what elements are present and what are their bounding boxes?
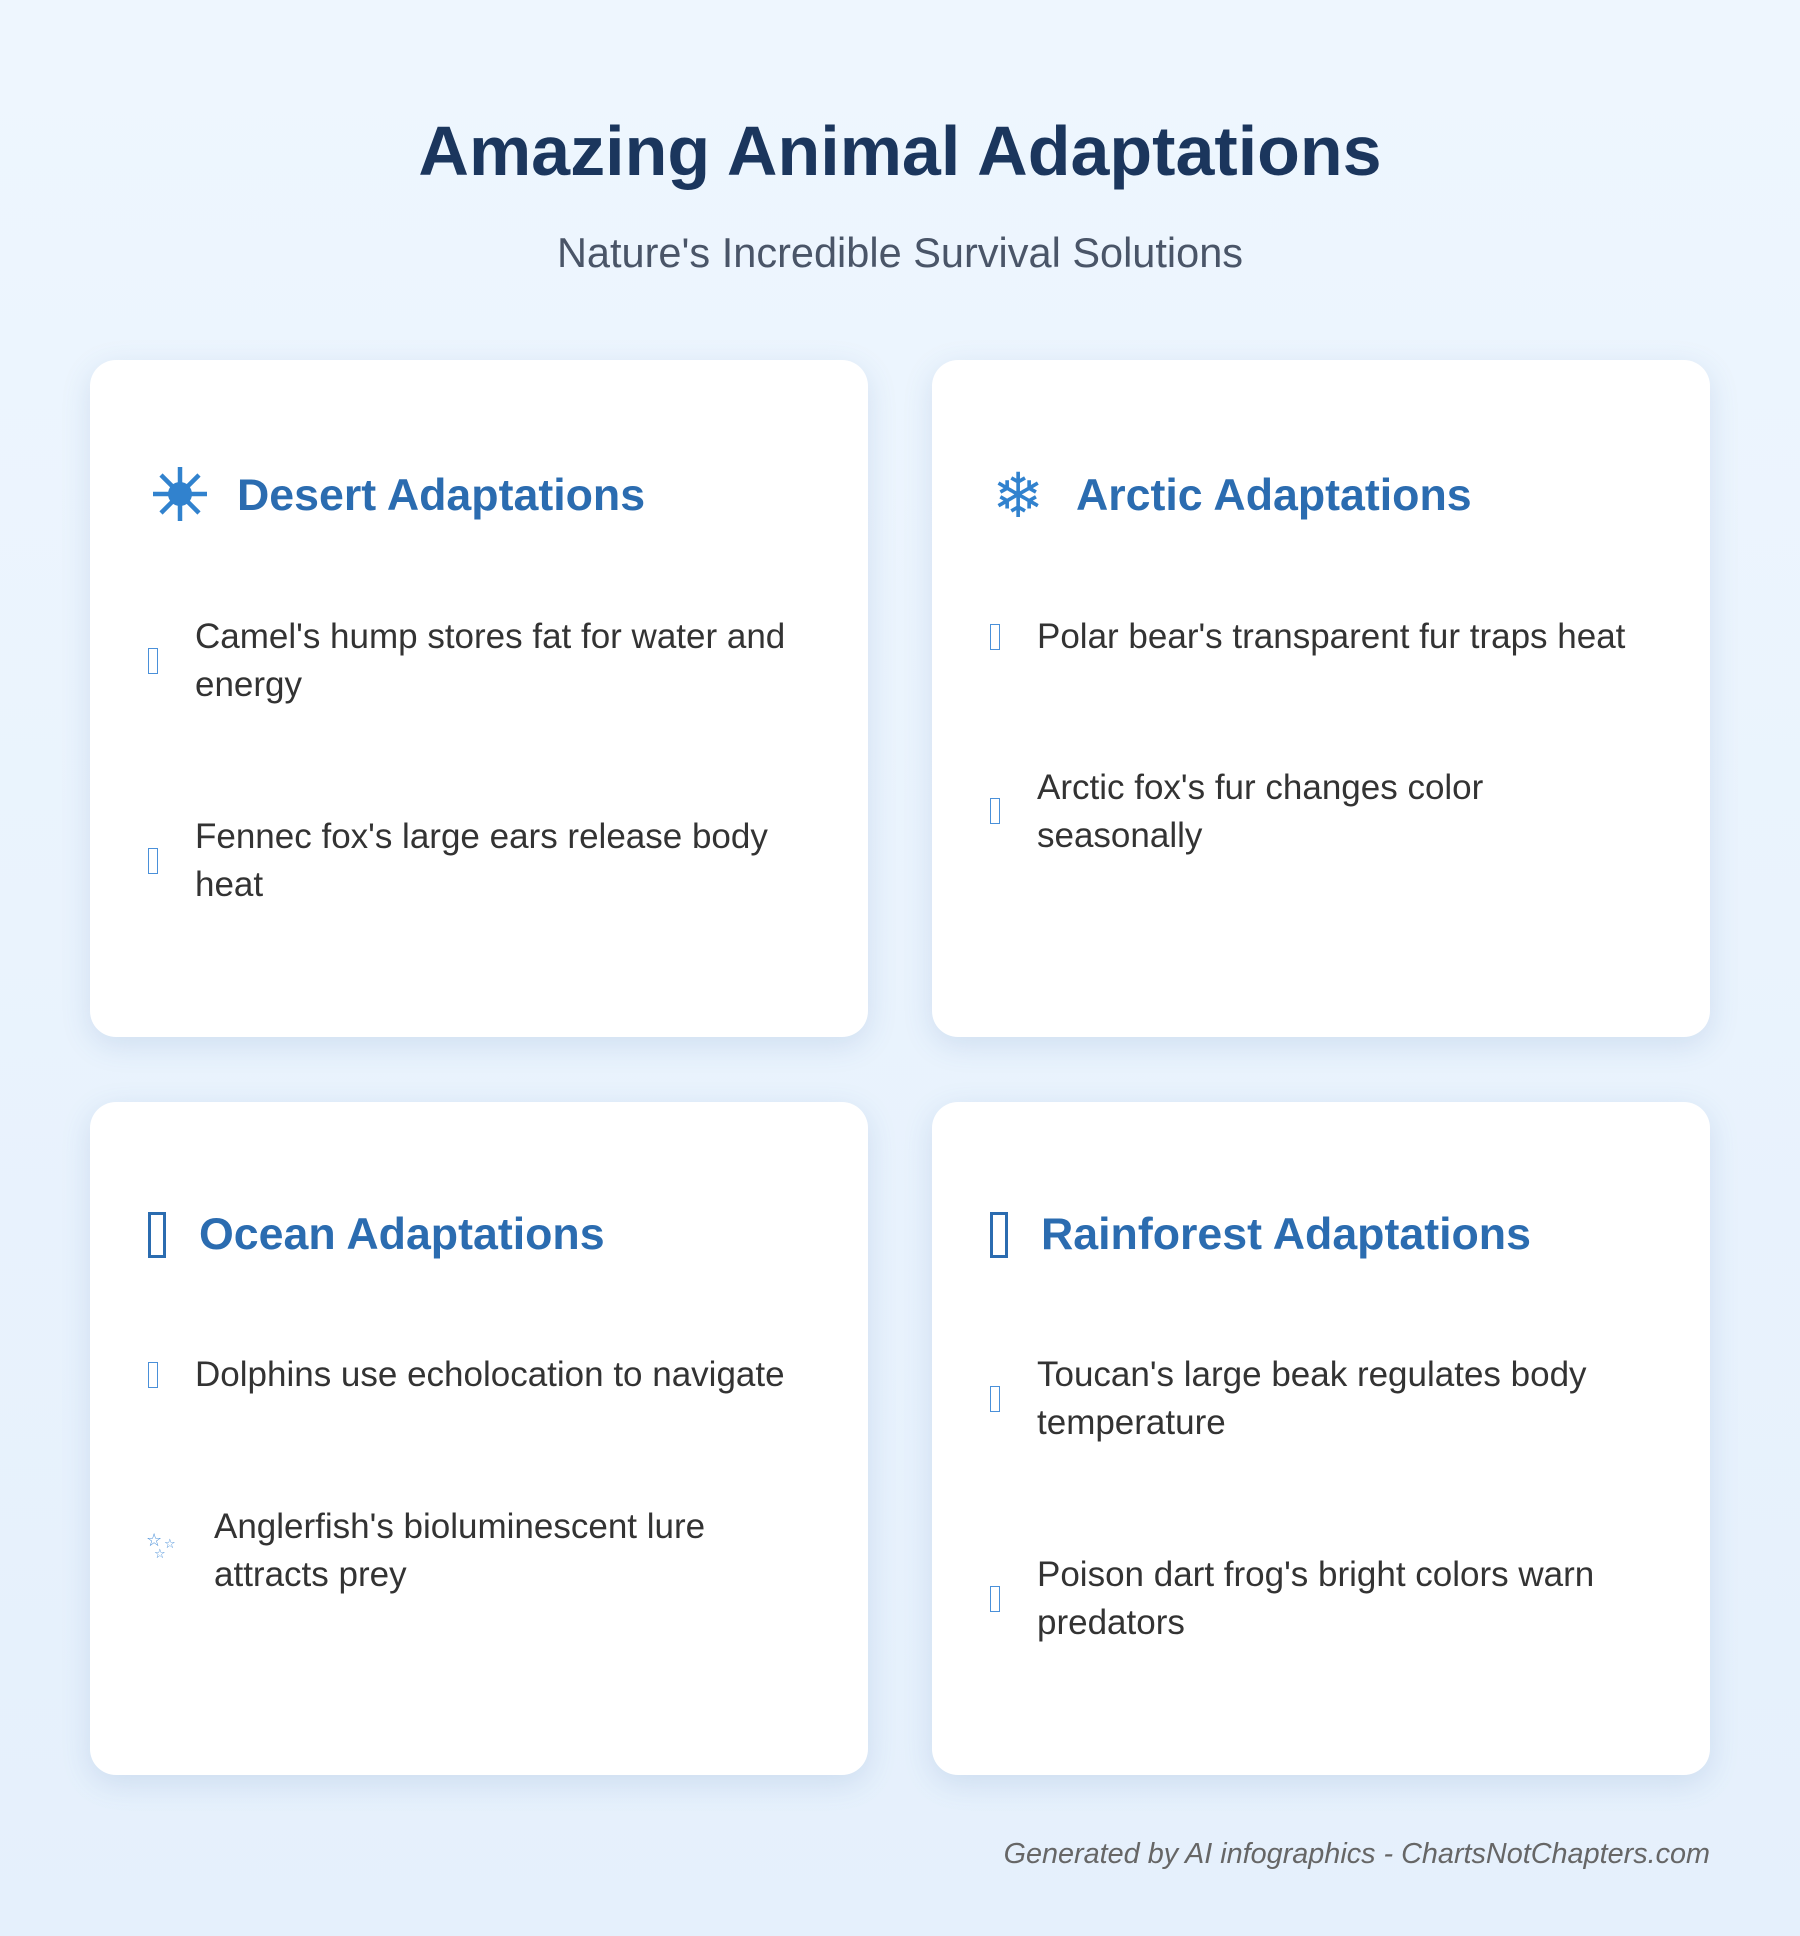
text: frog: Poison dart frog's bright colors warn predators (1037, 1555, 1594, 1642)
text: anglerfish: Anglerfish's bioluminescent lure attracts prey (214, 1507, 705, 1594)
icon: ocean (148, 1212, 166, 1258)
icon: sparkles: ☆ (164, 1537, 176, 1552)
heading: arctic: Arctic Adaptations (1076, 471, 1472, 520)
panel: desert (90, 360, 868, 1037)
subtitle: Nature's Incredible Survival Solutions (557, 229, 1243, 276)
panel: rainforest (932, 1102, 1710, 1775)
icon: sparkles (146, 1530, 176, 1562)
icon: frog (990, 1586, 1000, 1612)
text: polar bear: Polar bear's transparent fur traps heat (1037, 617, 1625, 656)
icon: toucan (990, 1386, 1000, 1412)
icon: polar bear (990, 624, 1000, 650)
text: toucan: Toucan's large beak regulates body temperature (1037, 1355, 1587, 1442)
icon: arctic fox (990, 798, 1000, 824)
text: dolphins: Dolphins use echolocation to navigate (195, 1355, 785, 1394)
icon: camel (148, 648, 158, 674)
heading: ocean: Ocean Adaptations (199, 1210, 605, 1259)
icon: fox (148, 848, 158, 874)
icon: sparkles: ☆ (146, 1530, 162, 1551)
text: arctic fox: Arctic fox's fur changes color seasonally (1037, 768, 1483, 855)
icon: sun (153, 467, 207, 521)
icon: sparkles: ☆ (154, 1547, 166, 1562)
icon: snowflake: ❄ (992, 459, 1044, 532)
icon: dolphin (148, 1362, 158, 1388)
title: Amazing Animal Adaptations (418, 112, 1382, 190)
heading: rainforest: Rainforest Adaptations (1041, 1210, 1531, 1259)
panel: ocean (90, 1102, 868, 1775)
footer: Generated by AI infographics - ChartsNotChapters.com (1004, 1838, 1710, 1870)
text: camel: Camel's hump stores fat for water and energy (195, 617, 785, 704)
heading: desert: Desert Adaptations (237, 471, 645, 520)
icon: rainforest (990, 1212, 1008, 1258)
panel: arctic (932, 360, 1710, 1037)
text: fennec fox: Fennec fox's large ears release body heat (195, 817, 768, 904)
